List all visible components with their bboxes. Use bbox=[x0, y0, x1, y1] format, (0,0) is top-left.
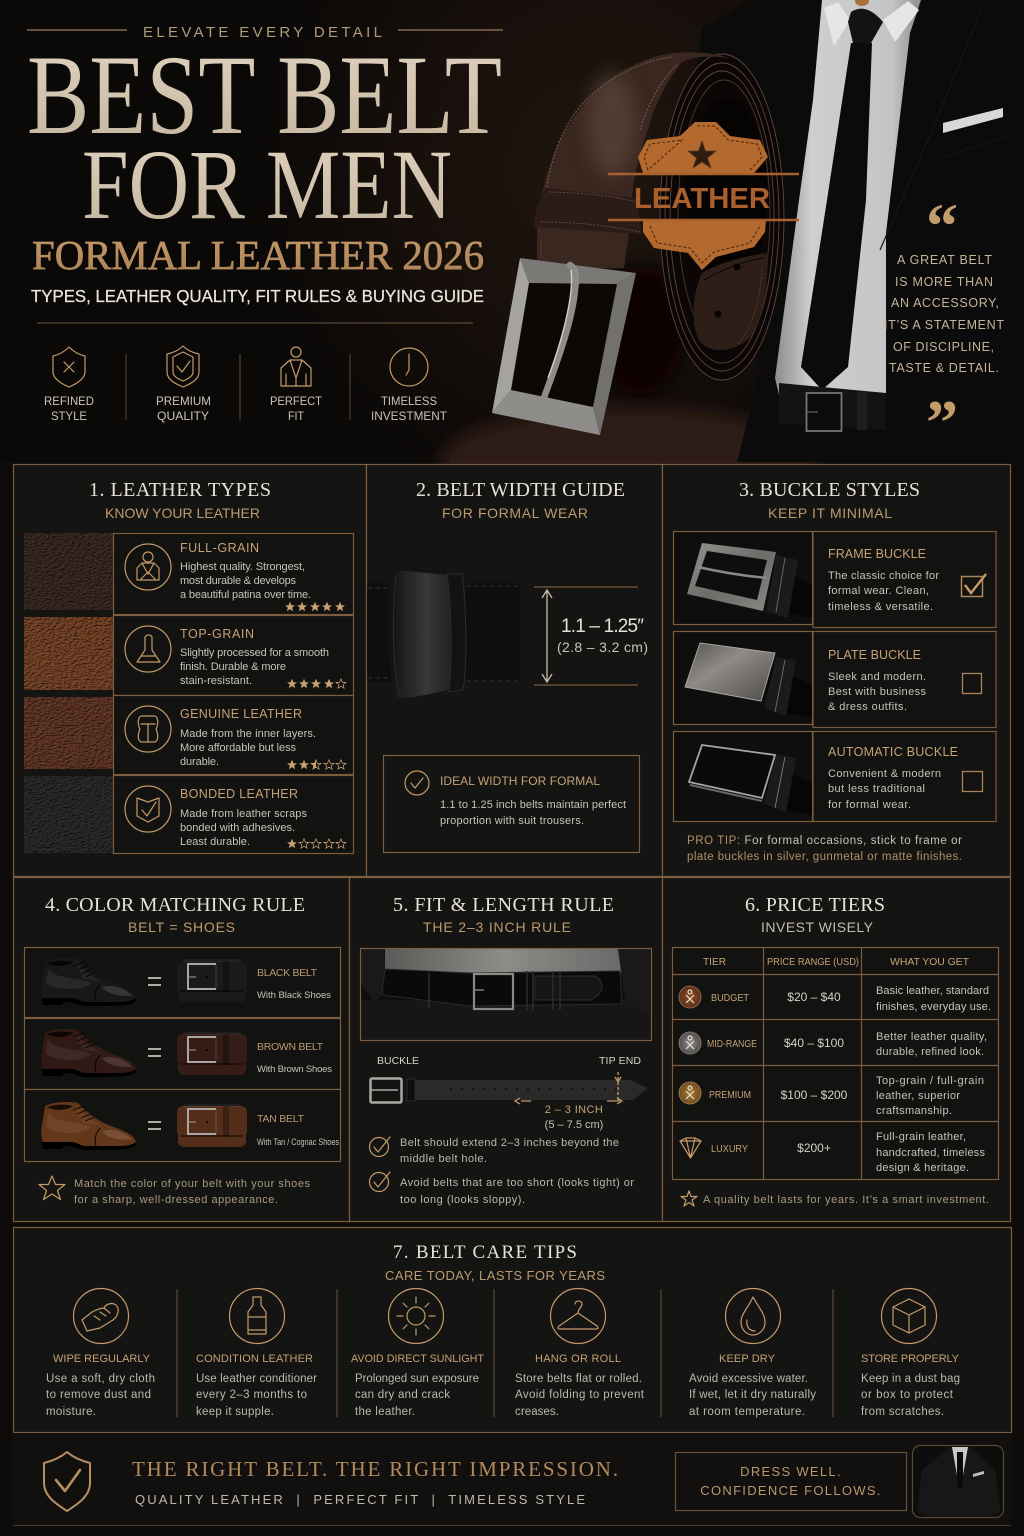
hero quote: ” bbox=[926, 387, 958, 458]
row: luxury: Full-grain leather, bbox=[876, 1131, 966, 1143]
row: mid-range bbox=[678, 1031, 987, 1058]
tip: A quality belt lasts for years. It’s a smart investment. bbox=[703, 1194, 989, 1206]
value labels: STYLE bbox=[51, 409, 87, 423]
tip: wipe: to remove dust and bbox=[46, 1389, 151, 1401]
row: top-grain: Slightly processed for a smooth bbox=[180, 647, 329, 659]
dimension lines: (2.8 – 3.2 cm) bbox=[557, 639, 648, 655]
row: automatic buckle: AUTOMATIC BUCKLE bbox=[828, 745, 958, 759]
row: mid-range: MID-RANGE bbox=[707, 1039, 757, 1050]
dimension: 2-3 inch: 2 – 3 INCH bbox=[545, 1104, 603, 1116]
row: bonded leather: Least durable. bbox=[180, 836, 250, 848]
row: genuine leather: durable. bbox=[180, 756, 219, 768]
tip: keep dry: If wet, let it dry naturally bbox=[689, 1389, 816, 1401]
hero banner bbox=[0, 0, 1024, 517]
hero eyebrow: ELEVATE EVERY DETAIL bbox=[143, 24, 382, 41]
diagram labels: BUCKLE bbox=[377, 1055, 419, 1067]
row: budget bbox=[678, 985, 991, 1013]
hero leather badge bbox=[608, 122, 799, 270]
table header: TIER bbox=[703, 956, 726, 968]
row: black bbox=[24, 948, 340, 1018]
row: full-grain bbox=[24, 533, 354, 614]
price table bbox=[672, 948, 998, 1180]
hero quote: OF DISCIPLINE, bbox=[893, 340, 994, 354]
callout: dress well: CONFIDENCE FOLLOWS. bbox=[700, 1483, 882, 1498]
value labels: PERFECT bbox=[270, 394, 323, 408]
heading: 4. COLOR MATCHING RULE bbox=[45, 894, 305, 916]
tip: sunlight: AVOID DIRECT SUNLIGHT bbox=[351, 1353, 484, 1365]
row: automatic buckle bbox=[674, 732, 996, 822]
subheading: CARE TODAY, LASTS FOR YEARS bbox=[385, 1268, 605, 1283]
row: genuine leather: More affordable but less bbox=[180, 742, 296, 754]
row: frame buckle bbox=[674, 532, 996, 628]
row: full-grain: FULL-GRAIN bbox=[180, 541, 259, 555]
row: tan: With Tan / Cognac Shoes bbox=[257, 1137, 339, 1147]
hero photo: rolled brown belt bbox=[534, 52, 784, 395]
panel 3: buckle styles bbox=[662, 464, 1010, 876]
row: full-grain: most durable & develops bbox=[180, 575, 296, 587]
heading: 2. BELT WIDTH GUIDE bbox=[416, 479, 625, 501]
panel 4: color matching bbox=[14, 878, 350, 1222]
row: black: BLACK BELT bbox=[257, 967, 318, 979]
heading: 3. BUCKLE STYLES bbox=[739, 479, 920, 501]
callout: dress well: DRESS WELL. bbox=[740, 1464, 842, 1479]
row: plate buckle: Best with business bbox=[828, 686, 926, 698]
tip: hang: Avoid folding to prevent bbox=[515, 1389, 645, 1401]
tip: for a sharp, well-dressed appearance. bbox=[74, 1194, 278, 1206]
row: luxury: $200+ bbox=[797, 1141, 831, 1155]
subheading: FOR FORMAL WEAR bbox=[442, 505, 588, 521]
hero quote: TASTE & DETAIL. bbox=[889, 361, 999, 375]
tip: sunlight: the leather. bbox=[355, 1406, 415, 1418]
row: genuine leather: GENUINE LEATHER bbox=[180, 707, 302, 721]
belt diagram bbox=[370, 1078, 648, 1102]
row: budget: Basic leather, standard bbox=[876, 985, 989, 997]
subheading: KEEP IT MINIMAL bbox=[768, 505, 892, 521]
suit thumbnail bbox=[912, 1446, 1004, 1518]
row: plate buckle: & dress outfits. bbox=[828, 701, 907, 713]
value labels: QUALITY bbox=[157, 409, 209, 423]
row: top-grain bbox=[24, 616, 354, 696]
row: full-grain: a beautiful patina over time. bbox=[180, 589, 311, 601]
main title: BEST BELT bbox=[27, 33, 502, 158]
tip: wipe: WIPE REGULARLY bbox=[53, 1353, 151, 1365]
rule: avoid: too long (looks sloppy). bbox=[400, 1194, 525, 1206]
tip: store: or box to protect bbox=[861, 1389, 954, 1401]
row: brown: With Brown Shoes bbox=[257, 1064, 332, 1075]
hero quote: A GREAT BELT bbox=[897, 253, 992, 267]
value labels: PREMIUM bbox=[156, 394, 211, 408]
callout: ideal width: proportion with suit trousers. bbox=[440, 815, 584, 827]
value labels bbox=[44, 394, 448, 423]
tip: sunlight: can dry and crack bbox=[355, 1389, 450, 1401]
tip: hang bbox=[515, 1288, 645, 1418]
tip: store: from scratches. bbox=[861, 1406, 944, 1418]
row: budget: finishes, everyday use. bbox=[876, 1001, 991, 1013]
heading: 7. BELT CARE TIPS bbox=[393, 1242, 577, 1263]
tip: condition: every 2–3 months to bbox=[196, 1389, 307, 1401]
tip: condition bbox=[196, 1288, 317, 1418]
tip bbox=[39, 1176, 310, 1206]
subtitle gold: FORMAL LEATHER 2026 bbox=[32, 232, 484, 278]
row: mid-range: durable, refined look. bbox=[876, 1046, 984, 1058]
photo: belt on trousers bbox=[360, 948, 652, 1040]
row: budget: BUDGET bbox=[711, 993, 749, 1004]
tip: wipe: moisture. bbox=[46, 1406, 96, 1418]
row: frame buckle: The classic choice for bbox=[828, 570, 939, 582]
tip: condition: CONDITION LEATHER bbox=[196, 1353, 313, 1365]
row: top-grain: stain-resistant. bbox=[180, 675, 252, 687]
subtitle white: TYPES, LEATHER QUALITY, FIT RULES & BUYING GUIDE bbox=[31, 286, 484, 306]
rule: extend: middle belt hole. bbox=[400, 1153, 487, 1165]
panel 1: leather types bbox=[14, 464, 366, 876]
subheading: THE 2–3 INCH RULE bbox=[423, 919, 571, 935]
tip: store: STORE PROPERLY bbox=[861, 1353, 960, 1365]
hero photo: metal buckle bbox=[492, 258, 636, 435]
hero quote: AN ACCESSORY, bbox=[891, 296, 999, 310]
row: frame buckle: FRAME BUCKLE bbox=[828, 547, 926, 561]
row: mid-range: Better leather quality, bbox=[876, 1031, 987, 1043]
tip: keep dry: Avoid excessive water. bbox=[689, 1373, 808, 1385]
tip: hang: HANG OR ROLL bbox=[535, 1353, 621, 1365]
dimension: 2-3 inch bbox=[515, 1072, 622, 1131]
tip: Match the color of your belt with your shoes bbox=[74, 1178, 310, 1190]
row: top-grain: TOP-GRAIN bbox=[180, 627, 254, 641]
row: plate buckle: PLATE BUCKLE bbox=[828, 648, 921, 662]
icon: shield bbox=[44, 1452, 90, 1511]
value labels: INVESTMENT bbox=[371, 409, 448, 423]
value labels: FIT bbox=[288, 409, 305, 423]
rule: extend: Belt should extend 2–3 inches beyond the bbox=[400, 1137, 619, 1149]
row: tan: TAN BELT bbox=[257, 1113, 305, 1125]
row: plate buckle: Sleek and modern. bbox=[828, 671, 926, 683]
panel 5: fit and length bbox=[350, 878, 662, 1222]
callout: ideal width: IDEAL WIDTH FOR FORMAL bbox=[440, 774, 600, 788]
tip: condition: Use leather conditioner bbox=[196, 1373, 317, 1385]
table header bbox=[703, 956, 970, 968]
panel 7: care tips bbox=[14, 1228, 1012, 1432]
row: plate buckle bbox=[674, 632, 996, 728]
table header: PRICE RANGE (USD) bbox=[767, 956, 859, 968]
tip: keep dry: KEEP DRY bbox=[719, 1353, 776, 1365]
row: budget: $20 – $40 bbox=[787, 990, 841, 1004]
row: luxury: LUXURY bbox=[711, 1144, 748, 1155]
tip: sunlight bbox=[351, 1288, 484, 1418]
rule: avoid bbox=[370, 1172, 634, 1206]
row: frame buckle: timeless & versatile. bbox=[828, 601, 933, 613]
tip: hang: creases. bbox=[515, 1406, 559, 1418]
row: automatic buckle: but less traditional bbox=[828, 783, 925, 795]
callout: dress well bbox=[676, 1452, 906, 1510]
icon: suit figure bbox=[281, 347, 311, 386]
belt close-up bbox=[367, 571, 520, 698]
row: premium: leather, superior bbox=[876, 1090, 960, 1102]
main title: FOR MEN bbox=[82, 129, 452, 240]
value labels: REFINED bbox=[44, 394, 94, 408]
icon: clock bbox=[390, 348, 428, 386]
row: genuine leather bbox=[24, 696, 354, 774]
table header: WHAT YOU GET bbox=[890, 956, 970, 968]
row: premium: $100 – $200 bbox=[781, 1088, 848, 1102]
row: premium bbox=[678, 1075, 984, 1117]
subheading: BELT = SHOES bbox=[128, 919, 235, 935]
heading: 5. FIT & LENGTH RULE bbox=[393, 894, 614, 916]
row: genuine leather: Made from the inner layers. bbox=[180, 728, 316, 740]
subheading: KNOW YOUR LEATHER bbox=[105, 505, 260, 521]
panel 2: belt width guide bbox=[366, 464, 662, 876]
tip: sunlight: Prolonged sun exposure bbox=[355, 1373, 479, 1385]
row: black: With Black Shoes bbox=[257, 990, 331, 1001]
hero quote: IS MORE THAN bbox=[895, 275, 993, 289]
rule: extend bbox=[370, 1137, 619, 1165]
row: premium: craftsmanship. bbox=[876, 1105, 952, 1117]
row: top-grain: finish. Durable & more bbox=[180, 661, 286, 673]
tip: keep dry bbox=[689, 1288, 816, 1418]
row: premium: PREMIUM bbox=[709, 1090, 751, 1101]
row: bonded leather: bonded with adhesives. bbox=[180, 822, 295, 834]
pro tip bbox=[687, 835, 962, 863]
tip: condition: keep it supple. bbox=[196, 1406, 274, 1418]
dimension lines: 1.1 – 1.25″ bbox=[561, 616, 644, 637]
callout: ideal width bbox=[384, 756, 640, 852]
icon: shield x bbox=[53, 347, 85, 387]
callout: ideal width: 1.1 to 1.25 inch belts maintain perfect bbox=[440, 799, 626, 811]
row: bonded leather bbox=[24, 776, 354, 854]
hero quote: IT’S A STATEMENT bbox=[884, 318, 1004, 332]
row: automatic buckle: Convenient & modern bbox=[828, 768, 941, 780]
tip: hang: Store belts flat or rolled. bbox=[515, 1373, 642, 1385]
tip: keep dry: at room temperature. bbox=[689, 1406, 805, 1418]
tip: store: Keep in a dust bag bbox=[861, 1373, 960, 1385]
row: luxury: design & heritage. bbox=[876, 1162, 969, 1174]
dimension: 2-3 inch: (5 – 7.5 cm) bbox=[545, 1119, 603, 1131]
main title bbox=[27, 33, 502, 240]
tip: wipe: Use a soft, dry cloth bbox=[46, 1373, 155, 1385]
row: bonded leather: BONDED LEATHER bbox=[180, 787, 298, 801]
icon: shield check bbox=[167, 346, 199, 387]
footer tags: QUALITY LEATHER | PERFECT FIT | TIMELESS STYLE bbox=[135, 1492, 585, 1507]
pro tip: plate buckles in silver, gunmetal or matte finishes. bbox=[687, 851, 962, 863]
badge word: LEATHER bbox=[634, 183, 770, 215]
row: mid-range: $40 – $100 bbox=[784, 1036, 844, 1050]
row: brown: BROWN BELT bbox=[257, 1041, 324, 1053]
hero divider bbox=[37, 322, 473, 324]
value labels: TIMELESS bbox=[381, 394, 437, 408]
dimension lines bbox=[534, 587, 648, 685]
footer headline: THE RIGHT BELT. THE RIGHT IMPRESSION. bbox=[132, 1457, 618, 1481]
row: brown bbox=[24, 1018, 340, 1090]
row: automatic buckle: for formal wear. bbox=[828, 799, 911, 811]
footer band bbox=[13, 1433, 1011, 1526]
row: bonded leather: Made from leather scraps bbox=[180, 808, 308, 820]
hero photo: suit bbox=[698, 0, 1024, 462]
hero quote: “ bbox=[926, 190, 958, 261]
row: luxury bbox=[680, 1131, 986, 1174]
heading: 6. PRICE TIERS bbox=[745, 894, 885, 916]
subheading: INVEST WISELY bbox=[761, 919, 874, 935]
hero value props bbox=[44, 346, 448, 423]
panel 6: price tiers bbox=[662, 878, 1010, 1222]
panel 5: fit and length: TIP END bbox=[599, 1055, 641, 1067]
row: premium: Top-grain / full-grain bbox=[876, 1075, 984, 1087]
hero quote bbox=[884, 190, 1004, 458]
row: tan bbox=[24, 1090, 340, 1162]
row: luxury: handcrafted, timeless bbox=[876, 1147, 986, 1159]
tip: wipe bbox=[46, 1288, 155, 1418]
row: full-grain: Highest quality. Strongest, bbox=[180, 561, 305, 573]
row: frame buckle: formal wear. Clean, bbox=[828, 585, 929, 597]
rule: avoid: Avoid belts that are too short (looks tight) or bbox=[400, 1177, 634, 1189]
pro tip: PRO TIP: For formal occasions, stick to frame or bbox=[687, 835, 962, 847]
tip: store bbox=[861, 1288, 960, 1418]
heading: 1. LEATHER TYPES bbox=[89, 479, 271, 501]
